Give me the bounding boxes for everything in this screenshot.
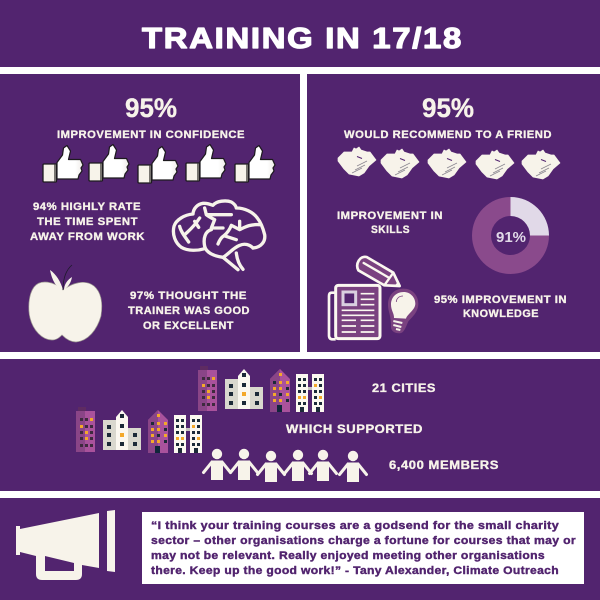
text: improvement in knowledge: 95% IMPROVEMENT IN — [434, 294, 567, 306]
quote text — [151, 520, 576, 577]
panel: cities and members — [0, 359, 600, 491]
icons: pencil, newspaper and bulb — [329, 257, 418, 339]
text: trainer rating: 97% THOUGHT THE — [130, 290, 247, 302]
text: trainer rating — [128, 290, 250, 332]
text: time away from work: 94% HIGHLY RATE — [33, 201, 141, 213]
icon: newspaper — [329, 285, 380, 339]
text: improvement in knowledge: KNOWLEDGE — [463, 308, 539, 320]
text: 21 cities: 21 CITIES — [372, 383, 436, 395]
icon: pencil — [357, 257, 400, 286]
quote box — [142, 512, 584, 584]
text: improvement in skills: SKILLS — [371, 224, 410, 236]
quote text: may not be relevant. Really enjoyed meeting other organisations — [151, 550, 545, 562]
label: would recommend to a friend: WOULD RECOMMEND TO A FRIEND — [344, 129, 552, 141]
text: improvement in skills — [337, 210, 443, 236]
text: time away from work — [30, 201, 145, 243]
icons: buildings lower row — [76, 407, 202, 453]
panel: confidence and wellbeing — [0, 74, 300, 352]
quote text: there. Keep up the good work!” - Tany Alexander, Climate Outreach — [151, 565, 559, 577]
quote text: sector – other organisations charge a fortune for courses that may or — [151, 535, 576, 547]
icon: apple — [29, 265, 102, 342]
text: improvement in skills: IMPROVEMENT IN — [337, 210, 443, 222]
icon: light bulb — [388, 289, 418, 333]
icons: buildings upper row — [198, 366, 324, 412]
quote text: “I think your training courses are a godsend for the small charity — [151, 520, 560, 532]
panel: title banner — [0, 0, 600, 67]
stat: 95% confidence: 95% — [125, 93, 177, 123]
text: trainer rating: TRAINER WAS GOOD — [128, 305, 250, 317]
text: time away from work: AWAY FROM WORK — [30, 231, 145, 243]
panel: testimonial — [0, 498, 600, 600]
text: time away from work: THE TIME SPENT — [37, 216, 138, 228]
icon: megaphone — [16, 510, 115, 580]
stat: 95% recommend: 95% — [422, 93, 474, 123]
chart: 91% donut: 91% — [496, 229, 526, 246]
icon: brain — [173, 201, 265, 270]
icons: five thumbs up — [43, 144, 275, 183]
text: improvement in knowledge — [434, 294, 567, 320]
panel: recommendation, skills and knowledge — [307, 74, 600, 352]
chart: 91% donut — [472, 197, 549, 274]
label: improvement in confidence: IMPROVEMENT IN CONFIDENCE — [57, 129, 245, 141]
icons: five handshakes — [338, 147, 560, 179]
text: 6,400 members: 6,400 MEMBERS — [389, 460, 499, 472]
icons: row of people — [204, 449, 366, 482]
title: TRAINING IN 17/18 — [142, 23, 463, 55]
text: which supported: WHICH SUPPORTED — [286, 424, 423, 436]
text: trainer rating: OR EXCELLENT — [143, 320, 234, 332]
